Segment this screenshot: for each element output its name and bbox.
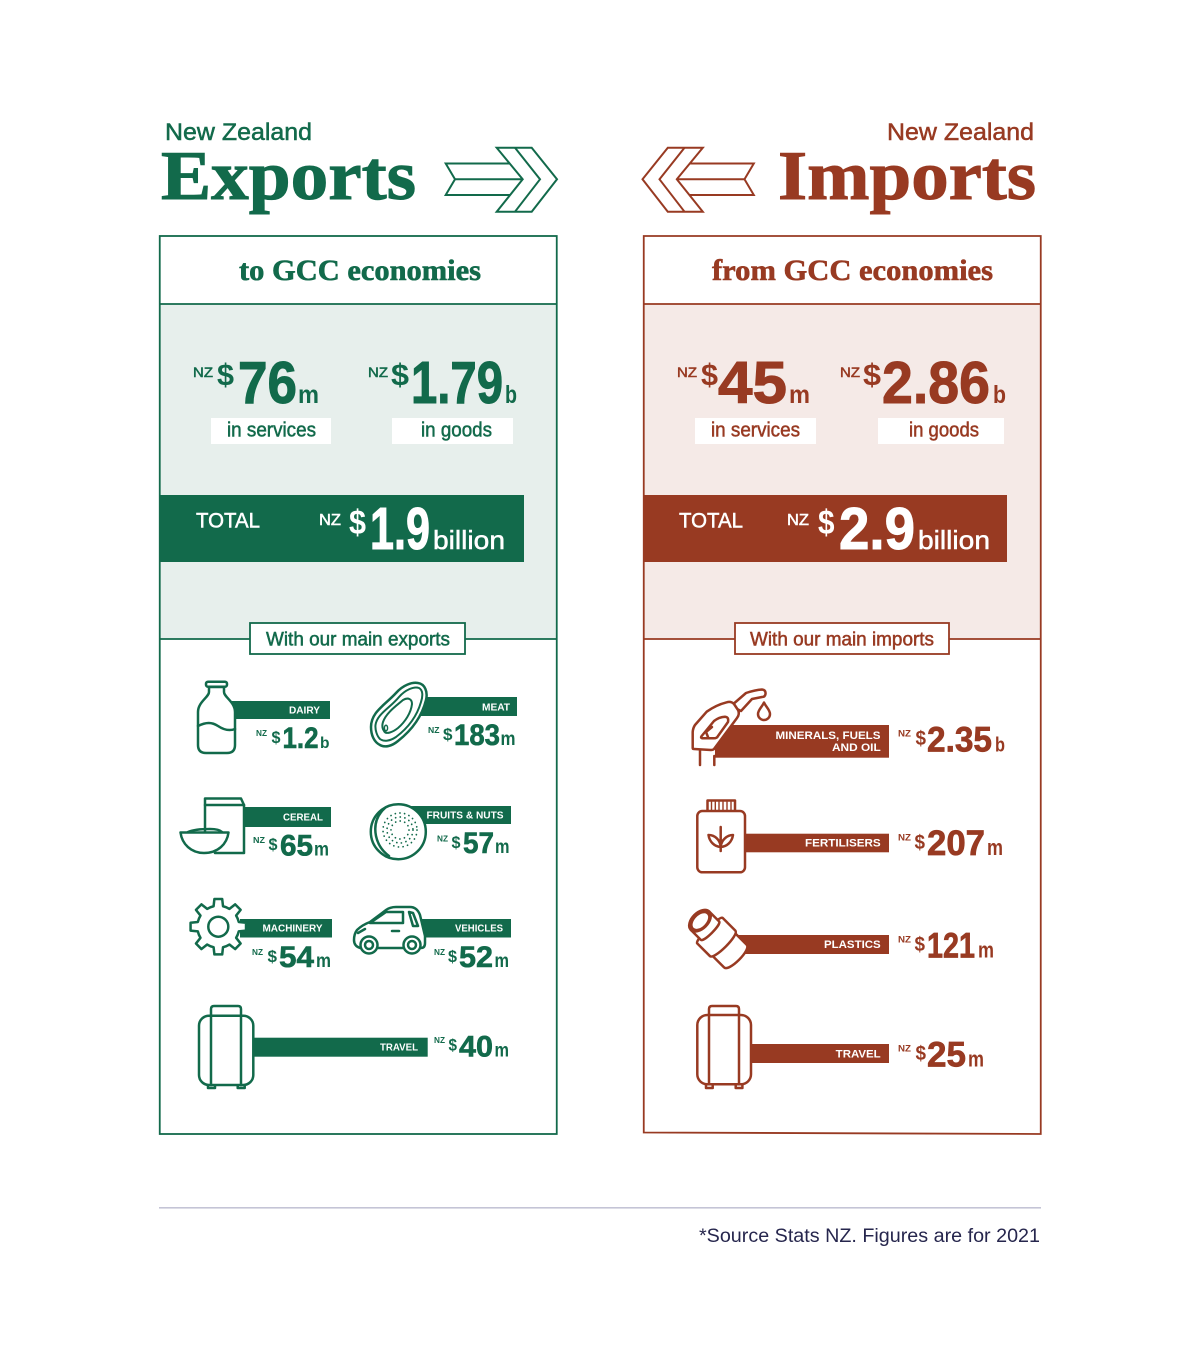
item: fruits and nuts xyxy=(371,804,511,860)
item: fruits and nuts: NZ xyxy=(437,834,448,844)
item: meat: m xyxy=(500,729,516,750)
stat: goods imports: NZ xyxy=(840,364,860,380)
item: travel exports xyxy=(199,1006,509,1088)
icon: plastic roll xyxy=(682,902,752,972)
label: with our main imports: With our main imports xyxy=(750,630,934,650)
stat: services imports: in services xyxy=(711,420,800,442)
total bar: exports xyxy=(160,495,524,562)
item: cereal: 65 xyxy=(280,830,313,863)
total bar: imports: NZ xyxy=(787,512,809,529)
item: machinery: MACHINERY xyxy=(262,924,323,935)
stat: services exports xyxy=(193,350,331,444)
total bar: imports xyxy=(644,495,1007,562)
item: travel exports: $ xyxy=(448,1036,457,1054)
item: meat: MEAT xyxy=(482,703,510,714)
stat: services exports: in services xyxy=(227,420,316,442)
item: minerals, fuels and oil: MINERALS, FUELS xyxy=(776,730,880,742)
item: machinery: NZ xyxy=(252,947,263,957)
item: machinery: 54 xyxy=(279,941,314,974)
panel: exports xyxy=(160,236,557,1134)
item: vehicles xyxy=(354,907,511,974)
subheading: to GCC economies: to GCC economies xyxy=(239,254,481,287)
item: meat xyxy=(371,683,517,752)
label: with our main imports xyxy=(735,623,949,654)
item: vehicles: $ xyxy=(448,947,458,966)
stat: services imports: m xyxy=(789,381,810,409)
item: travel imports: $ xyxy=(916,1043,926,1065)
arrow: imports xyxy=(642,148,754,212)
subheading: from GCC economies: from GCC economies xyxy=(712,254,993,287)
item: dairy: 1.2 xyxy=(282,722,318,755)
stat: goods exports: $ xyxy=(391,357,409,392)
stat: services exports: 76 xyxy=(238,350,297,416)
item: cereal: NZ xyxy=(253,835,265,845)
heading: exports: New Zealand xyxy=(165,119,312,146)
item: cereal: m xyxy=(314,840,329,861)
item: fruits and nuts: FRUITS & NUTS xyxy=(426,810,504,821)
item: machinery xyxy=(191,899,332,974)
stat: goods exports: NZ xyxy=(368,364,388,380)
stat: services exports: $ xyxy=(217,357,234,392)
total bar: imports: $ xyxy=(818,504,835,542)
item: vehicles: NZ xyxy=(434,947,445,957)
item: fertilisers xyxy=(697,800,1003,872)
label: with our main exports: With our main exports xyxy=(266,630,450,650)
item: fertilisers: 207 xyxy=(927,824,985,863)
icon: suitcase xyxy=(199,1006,253,1088)
item: travel exports: 40 xyxy=(459,1031,493,1064)
item: dairy: DAIRY xyxy=(289,706,320,716)
heading: imports: New Zealand xyxy=(887,119,1034,146)
item: cereal: CEREAL xyxy=(283,813,323,824)
icon: cereal box and bowl xyxy=(180,798,244,853)
item: fruits and nuts: 57 xyxy=(463,827,494,860)
label: with our main exports xyxy=(250,623,465,654)
stat: goods imports: b xyxy=(993,381,1006,409)
item: vehicles: m xyxy=(494,951,509,972)
arrow: exports xyxy=(446,148,557,212)
stat: goods exports: in goods xyxy=(421,420,492,442)
item: meat: $ xyxy=(443,725,453,744)
icon: car xyxy=(354,907,425,954)
item: fertilisers: m xyxy=(987,835,1003,860)
stat: goods imports xyxy=(840,350,1006,444)
stat: goods imports: in goods xyxy=(909,420,979,442)
item: minerals, fuels and oil xyxy=(693,690,1005,765)
item: travel exports: TRAVEL xyxy=(380,1043,418,1054)
item: travel imports: TRAVEL xyxy=(836,1049,881,1061)
stat: services imports: 45 xyxy=(718,350,787,416)
item: minerals, fuels and oil: 2.35 xyxy=(927,721,992,760)
item: travel exports: NZ xyxy=(434,1035,445,1045)
icon: steak xyxy=(371,683,427,746)
item: travel imports: m xyxy=(968,1047,984,1072)
icon: fuel nozzle xyxy=(693,690,770,765)
item: fertilisers: NZ xyxy=(898,833,911,844)
heading: exports: Exports xyxy=(161,138,416,215)
icon: kiwifruit xyxy=(371,804,426,859)
total bar: exports: $ xyxy=(349,504,366,542)
item: minerals, fuels and oil: b xyxy=(995,735,1005,757)
icon: suitcase xyxy=(697,1006,751,1088)
total bar: exports: NZ xyxy=(319,512,341,529)
item: dairy: NZ xyxy=(256,728,267,738)
total bar: imports: 2.9 xyxy=(839,496,915,562)
stat: goods exports: b xyxy=(505,381,517,409)
item: minerals, fuels and oil: NZ xyxy=(898,729,911,740)
item: meat: NZ xyxy=(428,725,440,735)
total bar: exports: TOTAL xyxy=(196,508,260,532)
item: fertilisers: FERTILISERS xyxy=(805,838,881,850)
item: cereal xyxy=(180,798,331,863)
item: fruits and nuts: $ xyxy=(452,833,461,852)
panel: imports xyxy=(644,236,1041,1134)
stat: goods imports: $ xyxy=(863,357,881,392)
item: minerals, fuels and oil: AND OIL xyxy=(832,742,881,754)
icon: milk bottle xyxy=(198,682,235,753)
total bar: imports: billion xyxy=(918,525,990,555)
icon: fertiliser bottle xyxy=(697,800,745,872)
item: travel imports: 25 xyxy=(927,1036,966,1075)
item: dairy: b xyxy=(320,735,330,752)
item: machinery: m xyxy=(316,951,331,972)
item: fruits and nuts: m xyxy=(495,837,510,858)
item: machinery: $ xyxy=(268,947,278,966)
item: fertilisers: $ xyxy=(914,832,925,854)
item: vehicles: 52 xyxy=(459,941,493,974)
item: dairy: $ xyxy=(272,728,281,747)
item: meat: 183 xyxy=(454,719,500,752)
source note: *Source Stats NZ. Figures are for 2021 xyxy=(699,1226,1040,1247)
stat: services exports: m xyxy=(298,381,319,409)
item: minerals, fuels and oil: $ xyxy=(916,728,926,750)
total bar: exports: 1.9 xyxy=(370,496,430,562)
item: plastics xyxy=(682,902,994,972)
item: plastics: m xyxy=(978,937,994,962)
stat: services imports: NZ xyxy=(677,364,697,380)
item: plastics: 121 xyxy=(927,926,975,965)
item: plastics: NZ xyxy=(898,934,911,945)
total bar: imports: TOTAL xyxy=(679,508,743,532)
stat: services imports: $ xyxy=(701,357,718,392)
item: dairy xyxy=(198,682,330,755)
heading: imports: Imports xyxy=(778,138,1036,215)
stat: services imports xyxy=(677,350,816,444)
item: travel imports: NZ xyxy=(898,1044,911,1055)
item: travel imports xyxy=(697,1006,984,1088)
item: cereal: $ xyxy=(268,835,278,854)
stat: goods exports xyxy=(368,350,517,444)
item: plastics: PLASTICS xyxy=(824,939,881,951)
item: travel exports: m xyxy=(494,1041,509,1062)
stat: services exports: NZ xyxy=(193,364,213,380)
stat: goods exports: 1.79 xyxy=(411,350,503,416)
item: vehicles: VEHICLES xyxy=(455,924,503,935)
stat: goods imports: 2.86 xyxy=(882,350,990,416)
item: plastics: $ xyxy=(914,934,925,956)
total bar: exports: billion xyxy=(433,525,505,555)
icon: gear xyxy=(191,899,246,954)
